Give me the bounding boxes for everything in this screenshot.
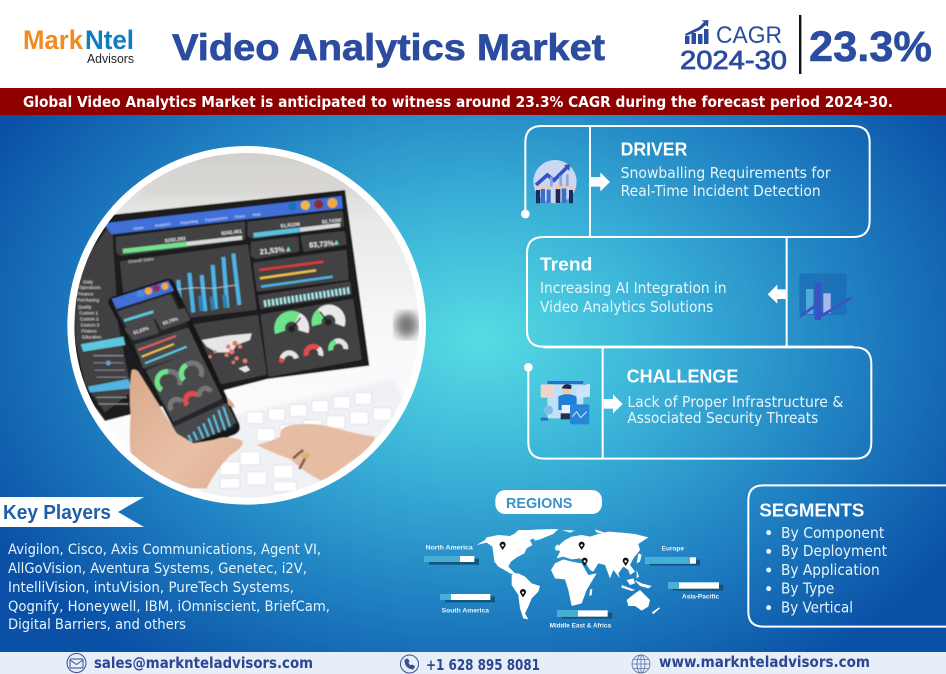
logo: MarkNtel Advisors: Ntel — [85, 25, 134, 55]
arrow: challenge — [604, 394, 623, 413]
phone KPI values: 83,75% — [162, 316, 179, 326]
header background — [0, 0, 946, 88]
sidebar labels and calendar: Quality — [78, 304, 92, 309]
dashboard panels — [118, 213, 360, 387]
phone header — [112, 281, 174, 309]
region: Europe — [645, 547, 700, 566]
right hand on keyboard — [257, 424, 375, 482]
photo circle: dashboard on monitor and phone — [60, 145, 433, 505]
KPI values: $192,293 — [165, 236, 186, 244]
gauges — [280, 316, 304, 332]
key players list: Qognify, Honeywell, IBM, iOmniscient, BriefCam, — [8, 599, 330, 615]
phone bars — [188, 407, 230, 442]
forecast period: 2024-30 — [680, 45, 787, 75]
driver heading: DRIVER — [621, 139, 688, 160]
CAGR block — [680, 15, 932, 75]
region: North America: North America — [426, 546, 473, 552]
region: Asia-Pacific — [668, 582, 723, 601]
phone KPI values — [133, 316, 179, 335]
icon: team under growth arrow — [533, 160, 577, 203]
divider — [799, 15, 801, 74]
KPI values: $1,812M — [280, 222, 300, 230]
world map on monitor — [202, 333, 252, 352]
segments list: By Application — [781, 562, 880, 579]
logo: MarkNtel Advisors: Advisors — [87, 51, 134, 66]
photo circle: dashboard on monitor and phone: Help — [252, 211, 262, 217]
trend description: Increasing AI Integration in — [540, 280, 727, 297]
region: South America: South America — [442, 609, 490, 615]
sidebar labels and calendar: Finance — [81, 328, 97, 333]
left hand holding phone — [130, 369, 243, 488]
photo circle: dashboard on monitor and phone: Home — [133, 225, 145, 231]
key players ribbon — [0, 497, 144, 527]
driver description: Snowballing Requirements for — [621, 165, 832, 182]
monitor header strip — [103, 196, 343, 234]
icon: bar chart with zigzag arrow — [799, 273, 852, 320]
sidebar labels and calendar: Operations — [79, 285, 101, 290]
CAGR label: CAGR — [716, 22, 782, 49]
segments list: By Vertical — [781, 600, 853, 617]
phone panels — [119, 296, 235, 447]
panel: challenge — [524, 347, 871, 459]
horizontal product bars — [259, 262, 333, 287]
contact: phone: +1 628 895 8081 — [426, 656, 540, 674]
arrow: trend — [768, 285, 787, 304]
driver description: Real-Time Incident Detection — [621, 183, 821, 200]
photo circle: dashboard on monitor and phone: Overall Sales — [128, 256, 154, 264]
KPI values: $2,743M — [322, 218, 342, 226]
key players list: IntelliVision, intuVision, PureTech Systems, — [8, 580, 294, 596]
regions pill — [495, 490, 602, 514]
key players list: Digital Barriers, and others — [8, 617, 186, 633]
pictogram row — [264, 290, 349, 304]
challenge heading: CHALLENGE — [627, 365, 738, 386]
world map — [477, 529, 660, 619]
region: North America — [424, 546, 479, 565]
contact: email: sales@marknteladvisors.com — [94, 654, 313, 672]
region: Europe: Europe — [662, 547, 685, 553]
panel: segments — [748, 485, 946, 627]
CAGR value: 23.3% — [809, 23, 932, 71]
trend outline — [527, 237, 853, 347]
keyboard — [199, 380, 402, 498]
trend heading: Trend — [540, 254, 592, 275]
key players list — [8, 542, 330, 633]
region: Middle East and Africa — [550, 610, 612, 630]
key players list: Avigilon, Cisco, Axis Communications, Agent VI, — [8, 542, 321, 558]
key players list: AllGoVision, Aventura Systems, Genetec, i2V, — [8, 561, 307, 577]
title: Video Analytics Market — [172, 27, 605, 68]
sidebar labels and calendar: Education — [82, 334, 102, 339]
icon: growth bars — [685, 20, 708, 44]
red summary banner — [0, 88, 946, 115]
region: Middle East and Africa: Middle East & Africa — [550, 624, 612, 630]
contact: phone — [400, 655, 540, 674]
photo circle: dashboard on monitor and phone: Reporting — [180, 218, 198, 225]
trend description — [540, 280, 727, 316]
monitor body — [73, 190, 369, 421]
KPI values: 21,53% — [259, 245, 285, 256]
regions pill: REGIONS — [506, 495, 572, 512]
icon: phone — [400, 655, 418, 673]
challenge description: Associated Security Threats — [627, 410, 818, 427]
KPI values: 83,73% — [309, 238, 335, 250]
panel: driver — [521, 126, 870, 237]
main gradient background — [0, 115, 946, 652]
contact: website: www.marknteladvisors.com — [659, 653, 870, 671]
sidebar labels and calendar: Custom 3 — [81, 322, 100, 327]
segments heading: SEGMENTS — [759, 499, 864, 520]
phone gauges — [157, 363, 211, 410]
icon: person with screens — [541, 381, 590, 424]
footer bar — [0, 652, 946, 674]
KPI values — [165, 218, 342, 256]
sidebar labels and calendar: Custom 2 — [80, 316, 99, 321]
logo: MarkNtel Advisors: Mark — [23, 25, 84, 55]
sidebar labels and calendar — [77, 279, 102, 339]
connector dot — [521, 210, 530, 218]
region: Asia-Pacific: Asia-Pacific — [682, 595, 720, 601]
challenge description — [627, 394, 843, 427]
segments list: By Type — [781, 581, 834, 598]
icon: globe — [632, 655, 650, 673]
blurred room background — [74, 153, 418, 426]
segments list: By Deployment — [781, 543, 887, 560]
challenge outline — [528, 347, 871, 459]
segments list: By Component — [781, 525, 885, 542]
sidebar labels and calendar: Daily — [83, 279, 94, 284]
photo circle: dashboard on monitor and phone: Transactions — [205, 215, 228, 223]
progress bars on panels — [123, 236, 242, 253]
panel: trend — [527, 237, 853, 347]
logo: MarkNtel Advisors — [23, 25, 134, 66]
segments list — [766, 525, 887, 617]
arrow: driver — [591, 172, 610, 191]
region: South America — [440, 594, 495, 615]
photo circle: dashboard on monitor and phone: Plans — [235, 213, 245, 219]
header round icons — [288, 202, 297, 211]
photo circle: dashboard on monitor and phone: Analytics — [155, 221, 171, 228]
sidebar labels and calendar: Finance — [78, 292, 94, 297]
challenge description: Lack of Proper Infrastructure & — [627, 394, 843, 411]
icon: envelope — [67, 654, 86, 672]
driver description — [621, 165, 832, 200]
KPI values: $242,491 — [221, 229, 242, 237]
segments outline — [748, 485, 946, 627]
driver outline — [525, 126, 870, 237]
smartphone — [108, 279, 240, 453]
phone KPI values: 51,53% — [133, 325, 150, 335]
sidebar labels and calendar: Custom 1 — [79, 310, 98, 315]
regions panel — [424, 490, 723, 630]
key players ribbon: Key Players — [3, 502, 111, 524]
main bar chart — [178, 254, 239, 313]
connector dot — [524, 363, 533, 372]
trend description: Video Analytics Solutions — [540, 299, 713, 316]
sidebar labels and calendar: Purchasing — [77, 298, 100, 303]
map pins — [500, 542, 629, 597]
